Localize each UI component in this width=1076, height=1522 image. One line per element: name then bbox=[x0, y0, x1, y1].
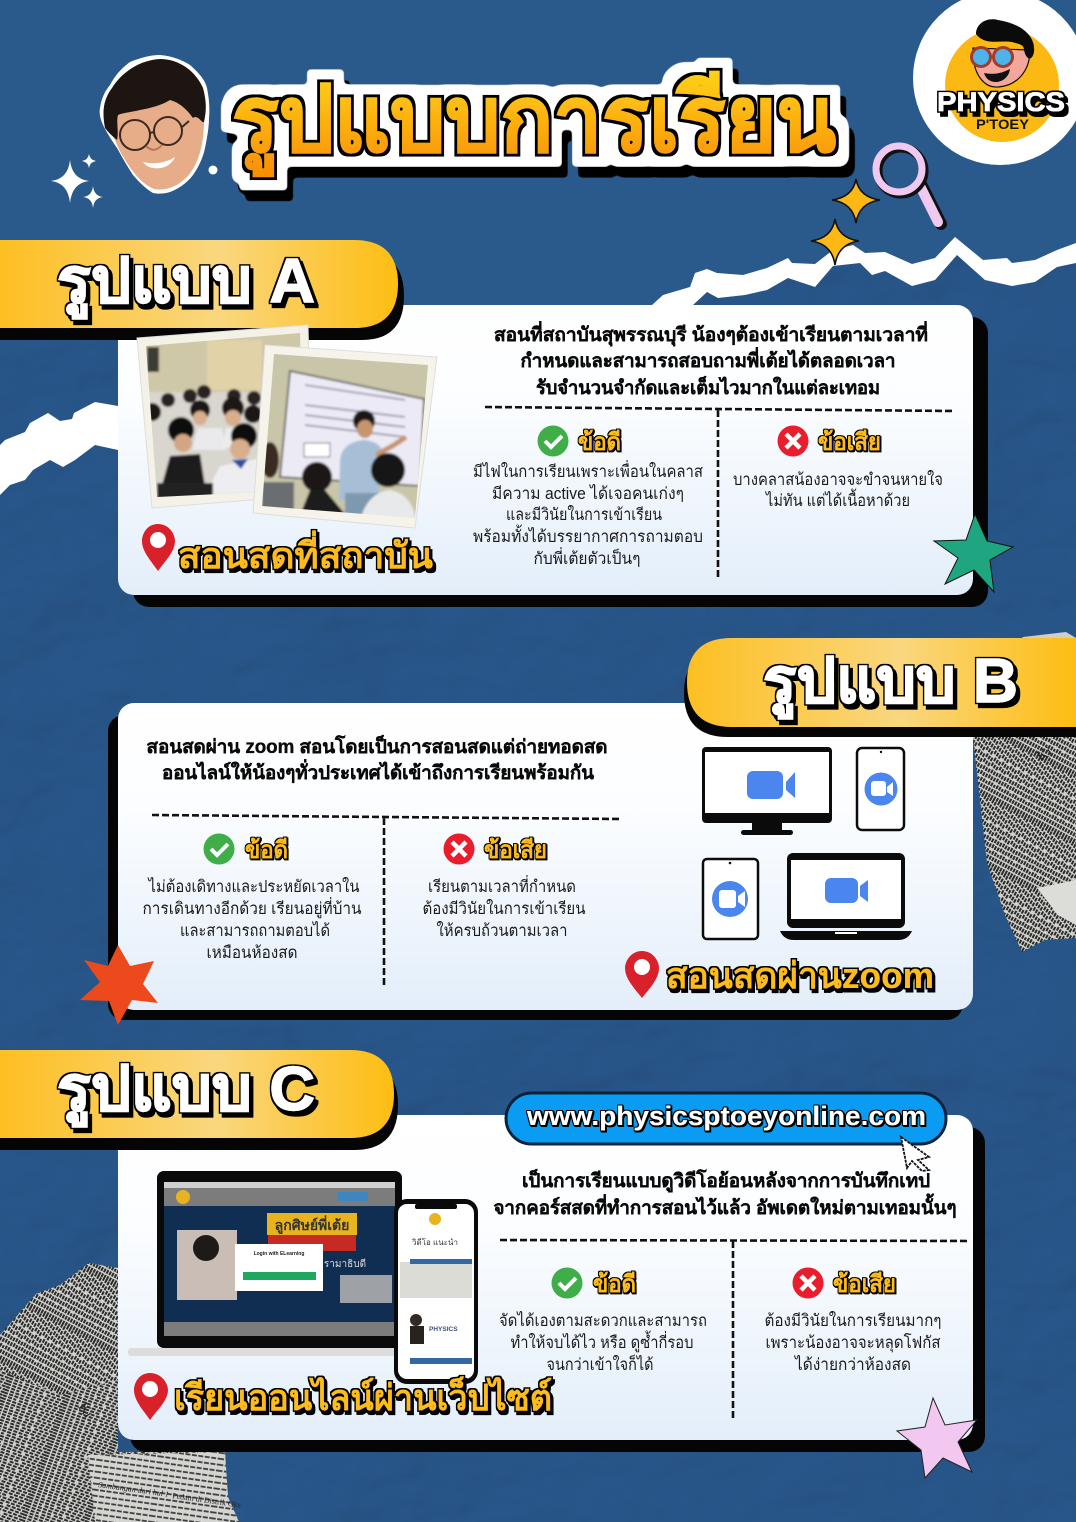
cons text A: บางคลาสน้องอาจจะขำจนหายใจ bbox=[733, 470, 943, 489]
description C: เป็นการเรียนแบบดูวิดีโอย้อนหลังจากการบันทึกเทป bbox=[522, 1168, 930, 1193]
location pin A bbox=[142, 524, 175, 571]
star: green bbox=[934, 514, 1013, 592]
device: tablet with zoom bbox=[703, 859, 758, 939]
cons text C: เพราะน้องอาจจะหลุดโฟกัส bbox=[766, 1333, 940, 1353]
logo: Physics P'Toey: P'TOEY bbox=[976, 116, 1030, 132]
newspaper scrap: bottom left: Pedam di Distrik Oks bbox=[172, 1491, 241, 1510]
panel: format B bbox=[108, 703, 973, 1020]
pros text B: เหมือนห้องสด bbox=[206, 944, 298, 962]
description B: สอนสดผ่าน zoom สอนโดยเป็นการสอนสดแต่ถ่ายทอดสด bbox=[146, 734, 608, 758]
icon: cross A bbox=[778, 426, 808, 456]
star: orange bbox=[80, 945, 158, 1025]
description C: จากคอร์สสดที่ทำการสอนไว้แล้ว อัพเดตใหม่ตามเทอมนั้นๆ bbox=[494, 1193, 956, 1219]
pros text C bbox=[499, 1311, 707, 1374]
newspaper scrap: bottom left: Ki bbox=[74, 1400, 96, 1421]
newspaper scrap: bottom left bbox=[0, 1263, 241, 1522]
pros text B: ไม่ต้องเดิทางและประหยัดเวลาใน bbox=[147, 877, 360, 896]
cons heading C: ข้อเสีย bbox=[833, 1271, 896, 1298]
torn white paper strip: left bbox=[0, 402, 118, 495]
cursor arrow bbox=[901, 1137, 929, 1171]
cons text B: ต้องมีวินัยในการเข้าเรียน bbox=[422, 899, 586, 918]
cons text B: ให้ครบถ้วนตามเวลา bbox=[436, 921, 568, 940]
header pill: format B bbox=[684, 638, 1076, 737]
URL pill bbox=[506, 1093, 946, 1144]
logo: Physics P'Toey bbox=[913, 0, 1076, 165]
icon: check C bbox=[552, 1268, 582, 1298]
description A bbox=[494, 321, 928, 399]
icon: cross B bbox=[444, 834, 474, 864]
pros heading A: ข้อดี bbox=[578, 429, 621, 456]
description B: ออนไลน์ให้น้องๆทั่วประเทศได้เข้าถึงการเรียนพร้อมกัน bbox=[162, 759, 594, 784]
icon: check A bbox=[538, 426, 568, 456]
pros text C: จนกว่าเข้าใจก็ได้ bbox=[546, 1354, 654, 1374]
cons text A bbox=[733, 470, 943, 510]
cons heading A: ข้อเสีย bbox=[818, 429, 881, 456]
newspaper scrap: right bbox=[973, 632, 1076, 952]
laptop with website screenshot bbox=[128, 1171, 402, 1356]
header pill: format C bbox=[0, 1050, 398, 1150]
pros text A: มีไฟในการเรียนเพราะเพื่อนในคลาส bbox=[473, 460, 703, 481]
pros heading C: ข้อดี bbox=[593, 1271, 636, 1298]
torn white paper strip: right bbox=[652, 237, 1076, 305]
pros text C: จัดได้เองตามสะดวกและสามารถ bbox=[499, 1311, 707, 1330]
pros text A: พร้อมทั้งได้บรรยากาศการถามตอบ bbox=[473, 524, 703, 546]
smartphone with website: วิดีโอ แนะนำ bbox=[412, 1237, 458, 1247]
pros text A: และมีวินัยในการเข้าเรียน bbox=[506, 505, 662, 524]
cons text C: ได้ง่ายกว่าห้องสด bbox=[793, 1355, 911, 1374]
panel: format C bbox=[118, 1115, 985, 1452]
laptop with website screenshot: ลูกศิษย์พี่เต้ย bbox=[275, 1215, 349, 1234]
teacher portrait head bbox=[100, 55, 209, 194]
description A: กำหนดและสามารถสอบถามพี่เต้ยได้ตลอดเวลา bbox=[520, 347, 896, 372]
photo: teacher at projector bbox=[253, 345, 437, 528]
decorative dot next to title bbox=[208, 166, 218, 174]
location pin C bbox=[134, 1373, 168, 1420]
star: pink bbox=[897, 1398, 977, 1478]
laptop with website screenshot: Login with ELearning bbox=[254, 1251, 304, 1257]
header pill: format A: รูปแบบ A bbox=[57, 247, 315, 319]
location label B: สอนสดผ่านzoom bbox=[666, 955, 934, 996]
description A: สอนที่สถาบันสุพรรณบุรี น้องๆต้องเข้าเรียนตามเวลาที่ bbox=[494, 321, 928, 347]
newspaper scrap: bottom left: Sambungan dari hal 1 bbox=[98, 1480, 170, 1499]
cons heading B: ข้อเสีย bbox=[484, 837, 547, 864]
URL pill: www.physicsptoeyonline.com bbox=[526, 1101, 926, 1131]
smartphone with website bbox=[394, 1199, 478, 1384]
cons text C: ต้องมีวินัยในการเรียนมากๆ bbox=[764, 1311, 942, 1330]
laptop with website screenshot: รามาธิบดี bbox=[324, 1258, 366, 1270]
description C bbox=[494, 1168, 956, 1219]
description A: รับจำนวนจำกัดและเต็มไวมากในแต่ละเทอม bbox=[536, 375, 880, 399]
header pill: format B: รูปแบบ B bbox=[763, 647, 1018, 719]
pros heading B: ข้อดี bbox=[245, 837, 288, 864]
icon: check B bbox=[204, 834, 234, 864]
newspaper scrap: right: Ki bbox=[1034, 744, 1055, 765]
yellow sparkle stars bbox=[811, 179, 880, 265]
logo: Physics P'Toey: PHYSICS bbox=[937, 87, 1065, 117]
pros text A: กับพี่เต้ยตัวเป็นๆ bbox=[534, 547, 640, 568]
photo: classroom students bbox=[137, 325, 312, 508]
device: laptop with zoom bbox=[780, 853, 912, 940]
location label A: สอนสดที่สถาบัน bbox=[178, 530, 433, 576]
magnifier icon bbox=[876, 146, 941, 224]
cons text B: เรียนตามเวลาที่กำหนด bbox=[428, 875, 576, 896]
pros text B: การเดินทางอีกด้วย เรียนอยู่ที่บ้าน bbox=[142, 897, 362, 919]
cons text C bbox=[764, 1311, 942, 1374]
smartphone with website: PHYSICS bbox=[429, 1326, 458, 1333]
pros text A bbox=[473, 460, 703, 568]
header pill: format A bbox=[0, 240, 404, 340]
pros text B bbox=[142, 877, 362, 962]
location pin B bbox=[625, 951, 659, 998]
icon: cross C bbox=[792, 1268, 824, 1298]
header pill: format C: รูปแบบ C bbox=[57, 1055, 315, 1127]
description B bbox=[146, 734, 608, 784]
panel: format A bbox=[0, 240, 988, 607]
device: monitor with zoom bbox=[702, 747, 832, 835]
pros text B: และสามารถถามตอบได้ bbox=[180, 921, 330, 940]
title: รูปแบบการเรียน bbox=[232, 69, 836, 177]
location label C: เรียนออนไลน์ผ่านเว็ปไซต์ bbox=[174, 1375, 552, 1418]
cons text B bbox=[422, 875, 586, 940]
cons text A: ไม่ทัน แต่ได้เนื้อหาด้วย bbox=[764, 488, 910, 510]
pros text A: มีความ active ได้เจอคนเก่งๆ bbox=[492, 484, 684, 503]
sparkles near portrait bbox=[51, 154, 103, 208]
pros text C: ทำให้จบได้ไว หรือ ดูซ้ำกี่รอบ bbox=[510, 1330, 694, 1353]
device: phone with zoom bbox=[857, 748, 904, 830]
